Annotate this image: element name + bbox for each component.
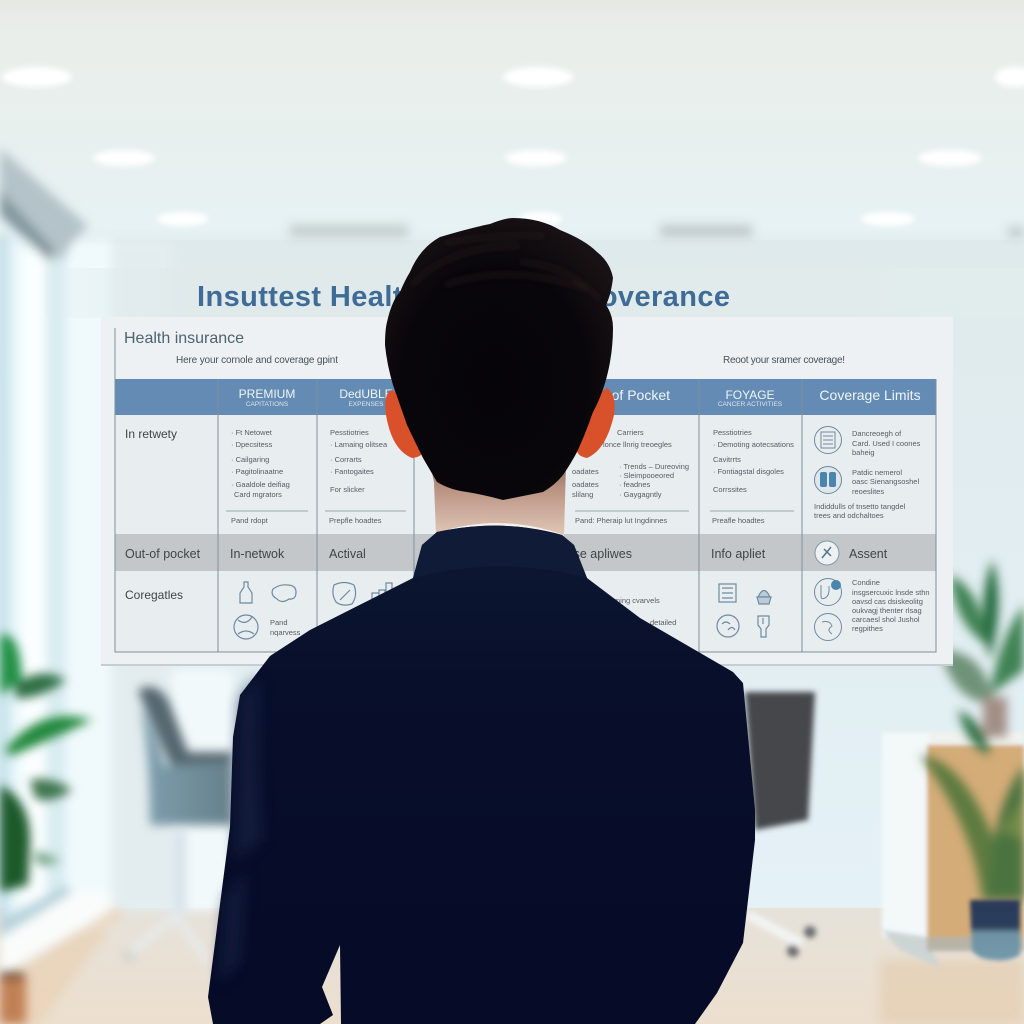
icon row: foyage — [717, 584, 771, 637]
icon: globe — [234, 615, 258, 639]
out of pocket column text: · Sleimpooeored — [619, 471, 674, 480]
potted plant, front right — [920, 755, 1024, 900]
out of pocket column text: · Trends – Dureoving — [619, 462, 689, 471]
premium column text — [231, 428, 290, 525]
header: premium: CAPITATIONS — [246, 401, 289, 408]
limits column text and icons: reoeslites — [852, 487, 884, 496]
limits column text and icons: carcaesl shol Jushol — [852, 615, 920, 624]
title: Insuttest Health Insurance Coverance — [197, 281, 730, 313]
limits column text and icons: Dancreoegh of — [852, 429, 902, 438]
band: in-network: In-netwok — [230, 547, 285, 561]
panel heading: Health insurance — [124, 330, 244, 347]
out of pocket column text: Carriers — [617, 428, 644, 437]
band: assent: Assent — [849, 547, 888, 561]
out of pocket column text: coming cvarvels — [606, 596, 660, 605]
ear: left — [385, 390, 423, 458]
out of pocket column text: lonce llnrig treoegles — [603, 440, 672, 449]
table grid — [115, 328, 936, 652]
deductible column text: · Corrarts — [330, 455, 362, 464]
band: actival: Actival — [329, 547, 366, 561]
deductible column text — [329, 428, 388, 525]
limits column text and icons: oukvagj thenter rlsag — [852, 606, 922, 615]
limits column text and icons: Indiddulls of tnsetto tangdel — [814, 502, 906, 511]
icon row: premium — [234, 582, 301, 639]
plant pot — [970, 900, 1020, 960]
foyage column text: Corrssites — [713, 485, 747, 494]
person seen from behind — [208, 218, 755, 1024]
foyage column text — [712, 428, 794, 525]
office chair, right — [745, 692, 816, 957]
row labels — [125, 427, 183, 602]
out of pocket column text: Pand: Pheraip lut Ingdinnes — [575, 516, 667, 525]
header: deductible — [339, 387, 393, 408]
header: deductible: EXPENSES — [348, 401, 384, 408]
title band — [45, 268, 1024, 318]
icon: heart tile — [333, 582, 356, 605]
premium column text: Pand rdopt — [231, 516, 269, 525]
icon: cupcake — [757, 590, 771, 604]
premium column text: · Dpecsitess — [231, 440, 273, 449]
icon: stethoscope — [814, 578, 842, 606]
hair — [385, 218, 613, 500]
icon label: Pand — [270, 618, 288, 627]
icon: wrench — [758, 616, 769, 637]
potted plant, left — [0, 635, 92, 1024]
panel: coverage comparison table — [101, 317, 953, 666]
band: info: Info apliet — [711, 547, 766, 561]
deductible column text: For slicker — [330, 485, 365, 494]
out of pocket column text: · feadnes — [619, 480, 651, 489]
label: in network: In retwety — [125, 427, 177, 441]
panel subheading right: Reoot your sramer coverage! — [723, 355, 845, 366]
icon: bars — [372, 583, 392, 600]
premium column text: Card mgrators — [234, 490, 282, 499]
out of pocket column text: detailed — [650, 618, 676, 627]
icon: calculator — [719, 584, 736, 602]
label: coverages: Coregatles — [125, 588, 183, 602]
out of pocket column text: oadates — [572, 480, 599, 489]
limits column text and icons: insgsercuxic lnsde sthn — [852, 588, 930, 597]
limits column text and icons: Condine — [852, 578, 880, 587]
grey band row — [115, 534, 936, 571]
deductible column text: Prepfle hoadtes — [329, 516, 382, 525]
header: coverage limits: Coverage Limits — [819, 387, 921, 403]
premium column text: · Gaaldole deifiag — [231, 480, 290, 489]
limits column text and icons: Card. Used I coones — [852, 439, 921, 448]
icon: document — [814, 426, 842, 454]
header: out of pocket: of Pocket — [612, 387, 670, 403]
premium column text: · Ft Netowet — [231, 428, 273, 437]
jacket sleeve shading — [220, 675, 262, 985]
limits column text and icons: regpithes — [852, 624, 883, 633]
reception desk — [882, 732, 1024, 968]
limits column text and icons: oasc Sienangsoshel — [852, 477, 919, 486]
header: foyage: FOYAGE — [725, 388, 775, 402]
out of pocket column text: slilang — [572, 490, 593, 499]
band: expense: se apliwes — [574, 547, 632, 561]
icon: assent badge — [815, 541, 839, 565]
limits column text and icons — [814, 426, 930, 640]
foyage column text: Cavitrrts — [713, 455, 741, 464]
out of pocket column text: · Gaygagntly — [619, 490, 662, 499]
hair highlights — [412, 236, 600, 300]
deductible column text: · Lamaing olitsea — [330, 440, 388, 449]
foyage column text: · Fontiagstal disgoles — [713, 467, 784, 476]
icon label 2: nqarvess — [270, 628, 301, 637]
limits column text and icons: oavsd cas dsiskeolitg — [852, 597, 923, 606]
premium column text: · Pagitolinaatne — [231, 467, 283, 476]
deductible column text: Pesstiotries — [330, 428, 369, 437]
foyage column text: Pesstiotries — [713, 428, 752, 437]
header: foyage — [718, 388, 783, 408]
icon row: deductible — [333, 582, 392, 605]
panel subheading left: Here your cornole and coverage gpint — [176, 355, 338, 366]
premium column text: · Cailgaring — [231, 455, 269, 464]
ear: right — [577, 388, 615, 458]
shirt collar — [436, 523, 564, 540]
potted plant, right — [940, 560, 1024, 755]
limits column text and icons: trees and odchaltoes — [814, 511, 884, 520]
icon: book — [814, 466, 842, 494]
icon: bottle — [240, 582, 252, 603]
header: foyage: CANCER ACTIVITIES — [718, 401, 783, 408]
foyage column text: Preafle hoadtes — [712, 516, 765, 525]
jacket collar — [413, 526, 587, 578]
table header row — [115, 379, 936, 415]
band: row label: Out-of pocket — [125, 547, 201, 561]
out of pocket column text — [572, 428, 689, 627]
icon: cloud animal — [272, 585, 296, 602]
deductible column text: · Fantogaites — [330, 467, 374, 476]
icon: care — [814, 614, 842, 640]
header: premium: PREMIUM — [239, 387, 295, 401]
header: deductible: DedUBLE — [339, 387, 393, 401]
suit jacket — [208, 526, 755, 1024]
limits column text and icons: Patdic nemerol — [852, 468, 902, 477]
office chair, left — [125, 687, 232, 962]
foyage column text: · Demoting aotecsations — [713, 440, 794, 449]
out of pocket column text: oadates — [572, 467, 599, 476]
neck — [425, 440, 577, 535]
limits column text and icons: baheig — [852, 448, 875, 457]
header: premium — [239, 387, 295, 408]
icon: smile — [717, 615, 739, 637]
